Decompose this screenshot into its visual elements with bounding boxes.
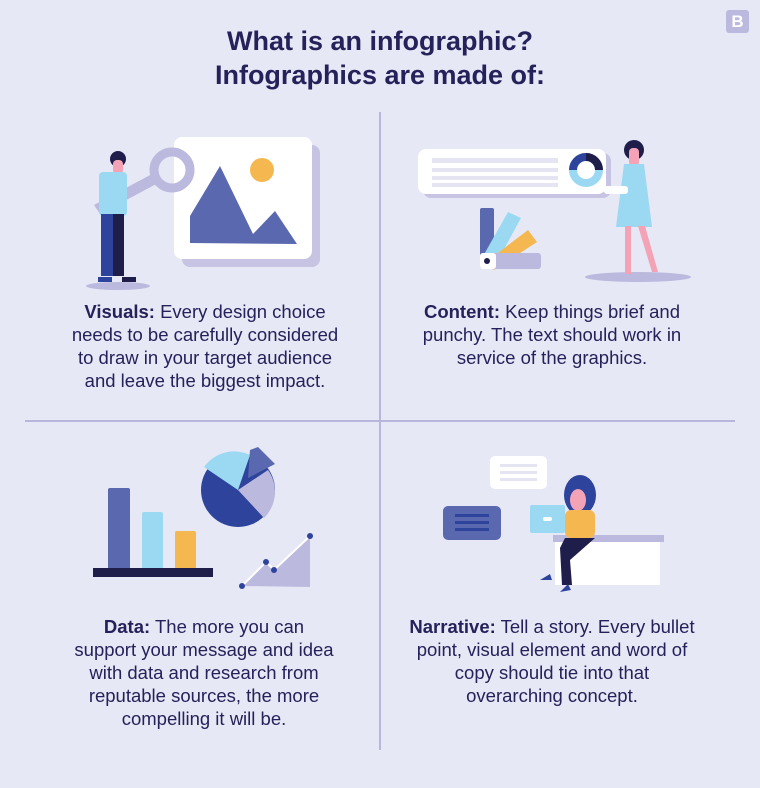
text: visuals: needs to be carefully considered — [72, 324, 338, 345]
text: data: compelling it will be. — [122, 708, 286, 729]
icon: narrative illustration — [443, 456, 664, 592]
text: visuals: and leave the biggest impact. — [85, 370, 325, 391]
text: data: support your message and idea — [74, 639, 334, 660]
text: visuals: Visuals: Every design choice — [84, 301, 326, 322]
text: narrative: Narrative: Tell a story. Every bullet — [409, 616, 695, 637]
text: data — [74, 616, 334, 729]
text: narrative — [409, 616, 695, 706]
icon: visuals illustration — [86, 137, 320, 290]
text: narrative: point, visual element and word of — [417, 639, 687, 660]
text: visuals — [72, 301, 338, 391]
text: data: reputable sources, the more — [89, 685, 319, 706]
text: visuals: to draw in your target audience — [78, 347, 332, 368]
title: What is an infographic? — [227, 26, 533, 56]
logo badge: B — [731, 12, 744, 31]
logo badge — [726, 10, 749, 33]
text: narrative: overarching concept. — [466, 685, 638, 706]
text: narrative: copy should tie into that — [455, 662, 649, 683]
title — [215, 26, 545, 90]
text: content: service of the graphics. — [457, 347, 647, 368]
text: content: punchy. The text should work in — [423, 324, 681, 345]
title: Infographics are made of: — [215, 60, 545, 90]
text: content: Content: Keep things brief and — [424, 301, 680, 322]
text: data: with data and research from — [89, 662, 319, 683]
icon: content illustration — [418, 140, 691, 282]
text: content — [423, 301, 681, 368]
icon: data charts — [93, 447, 313, 589]
text: data: Data: The more you can — [104, 616, 304, 637]
